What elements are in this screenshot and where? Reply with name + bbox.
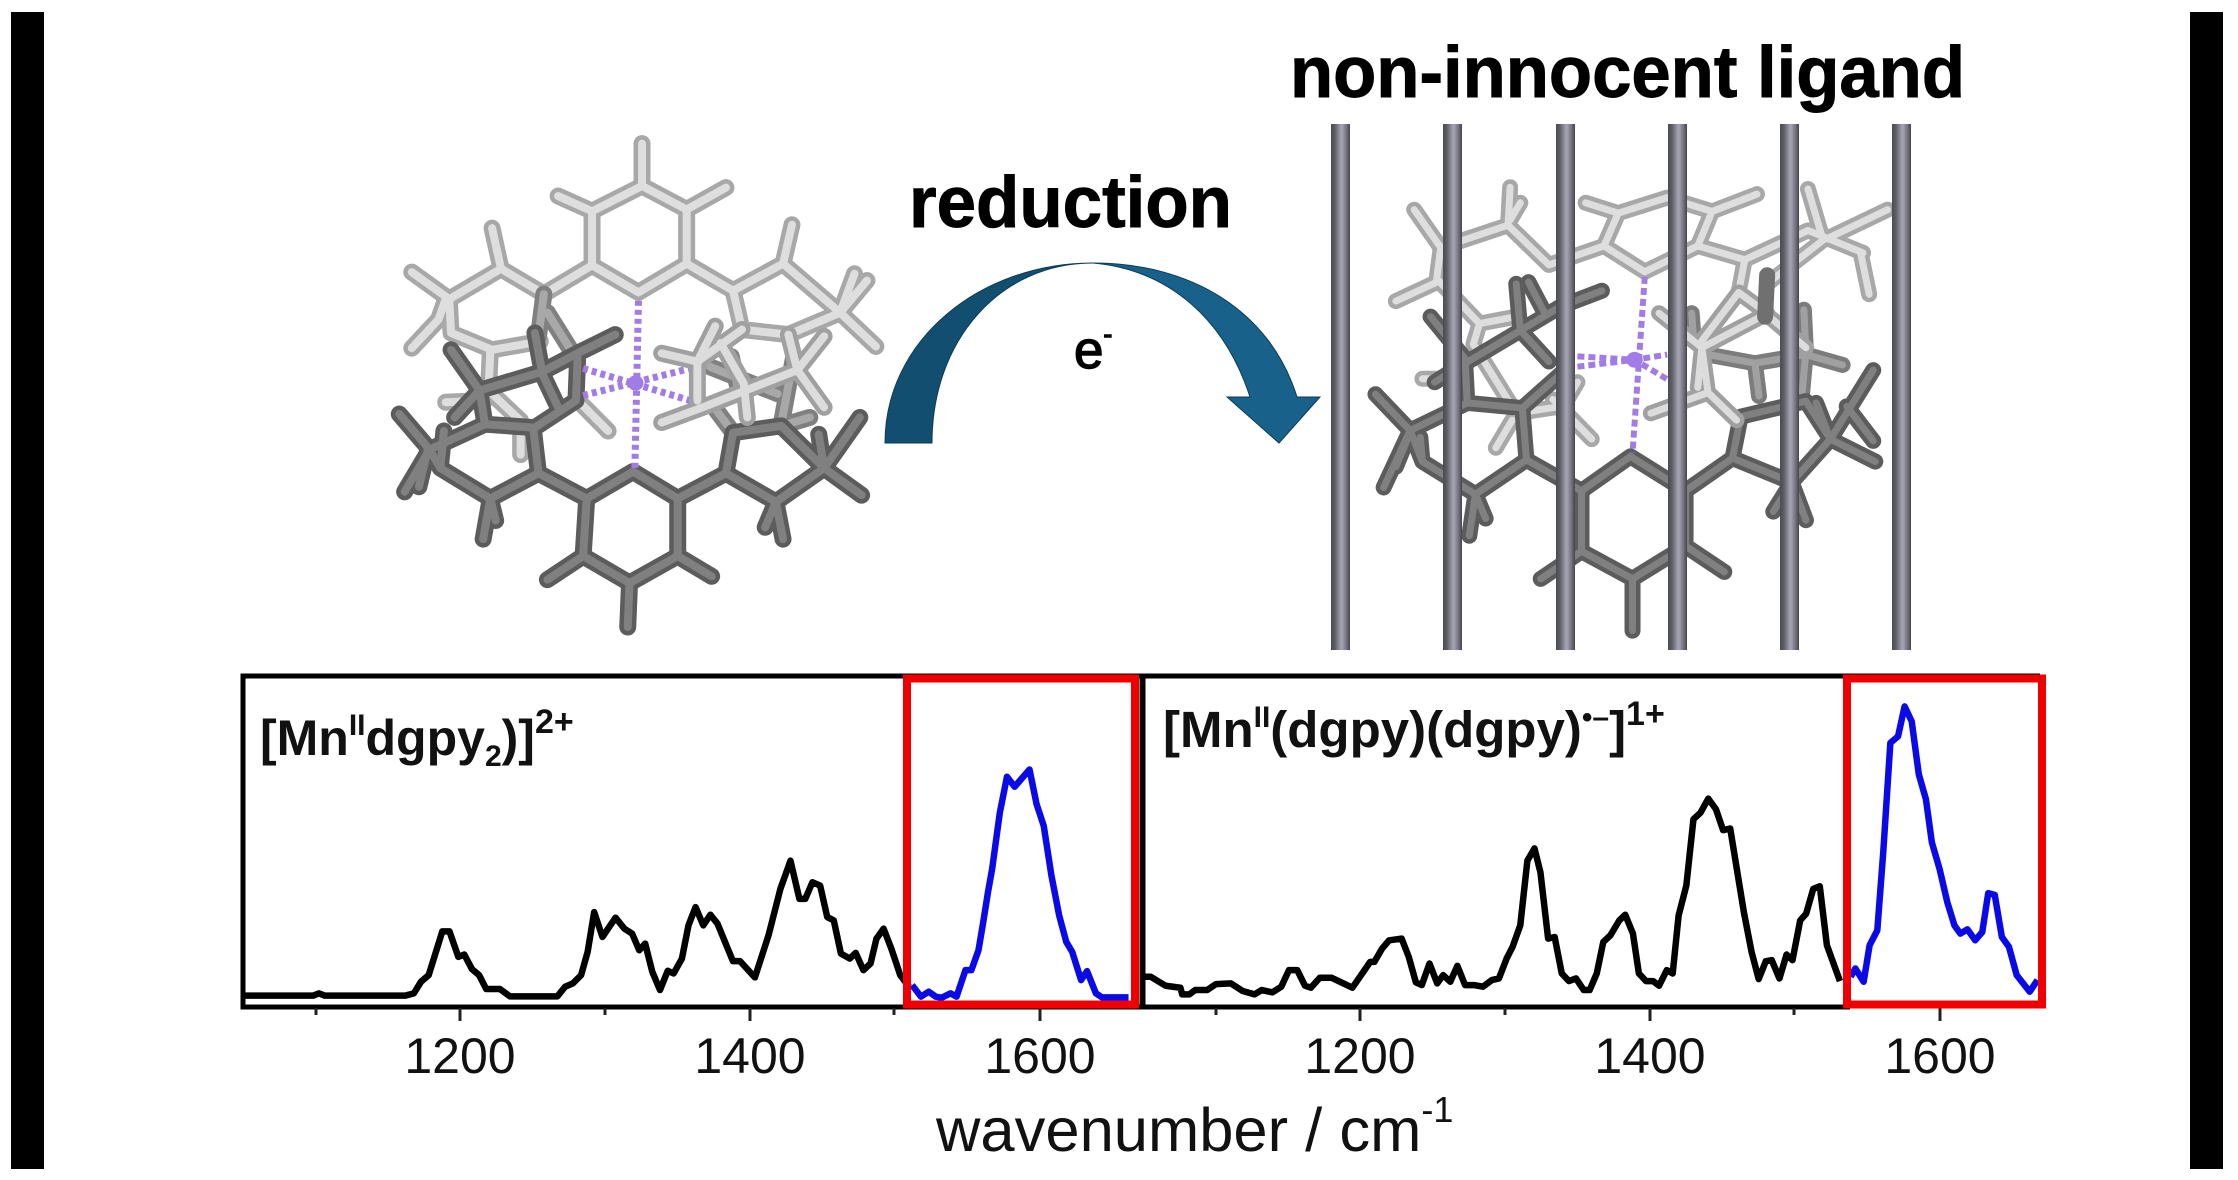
left spectrum label: dgpy	[366, 710, 485, 766]
right spectrum ticks	[1216, 1008, 1940, 1021]
molecule: reduced complex	[1375, 187, 1888, 631]
right spectrum label: ]	[1609, 701, 1626, 758]
left spectrum label: )]	[502, 710, 535, 766]
right tick labels	[1304, 1028, 1996, 1084]
chart: left spectrum	[243, 676, 1143, 1084]
rods: non-innocent ligand bars	[1331, 124, 1911, 650]
left spectrum label: 2	[485, 740, 502, 773]
left spectrum ticks	[316, 1008, 1040, 1021]
left black bar	[11, 12, 44, 1169]
left spectrum label: [Mn	[260, 710, 349, 766]
left tick labels: 1600	[984, 1028, 1096, 1084]
left tick labels: 1400	[694, 1028, 806, 1084]
left spectrum blue trace	[912, 769, 1129, 998]
right tick labels: 1400	[1594, 1028, 1706, 1084]
molecule: Mn(II) complex	[399, 144, 876, 627]
right tick labels: 1600	[1884, 1028, 1996, 1084]
axis title: -1	[1421, 1089, 1453, 1130]
left spectrum label: II	[349, 709, 366, 742]
right spectrum label: (dgpy)(dgpy)	[1270, 701, 1582, 758]
right spectrum label: •–	[1582, 701, 1609, 734]
left red highlight box	[907, 678, 1135, 1004]
right spectrum label: [Mn	[1163, 701, 1254, 758]
left spectrum label: 2+	[535, 703, 574, 741]
right tick labels: 1200	[1304, 1028, 1416, 1084]
right red highlight box	[1847, 678, 2042, 1004]
heading: reduction: reduction	[909, 163, 1232, 243]
right spectrum blue trace	[1851, 706, 2037, 992]
label: electron: -	[1103, 319, 1112, 349]
right black bar	[2190, 12, 2223, 1169]
heading: non-innocent ligand: non-innocent ligand	[1290, 33, 1965, 113]
label: electron: e	[1074, 321, 1103, 380]
right spectrum label: II	[1254, 701, 1270, 734]
right spectrum black trace	[1143, 799, 1840, 994]
left tick labels: 1200	[404, 1028, 516, 1084]
right spectrum label: 1+	[1626, 695, 1665, 733]
left spectrum black trace	[245, 861, 909, 996]
axis title: wavenumber / cm	[936, 1096, 1421, 1165]
arrow: reduction	[885, 263, 1320, 443]
chart: right spectrum	[1142, 676, 2042, 1084]
left tick labels	[404, 1028, 1096, 1084]
